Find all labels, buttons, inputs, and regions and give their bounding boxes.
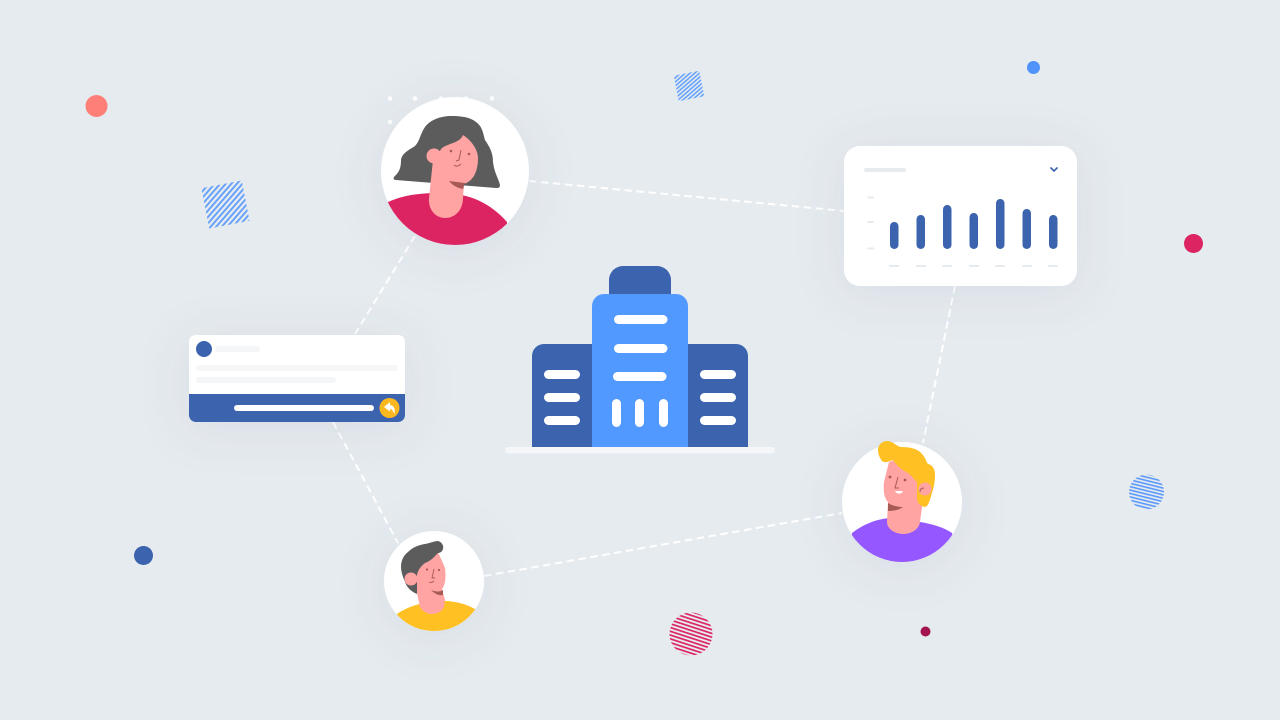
hatched circle crimson bbox=[670, 612, 712, 656]
hatched square small bbox=[674, 71, 704, 101]
building right wing bbox=[680, 344, 748, 447]
hatched circle blue bbox=[1129, 474, 1164, 510]
card footer bar bbox=[189, 394, 405, 422]
avatar: man bbox=[842, 441, 962, 570]
white dot grid near woman bbox=[388, 96, 494, 124]
boy ear bbox=[404, 572, 418, 586]
card avatar dot bbox=[196, 341, 212, 357]
woman facial features bbox=[450, 150, 470, 166]
boy neck shadow bbox=[431, 590, 443, 595]
woman neck and face bbox=[429, 135, 478, 218]
man hair bbox=[878, 441, 935, 507]
icon: reply button bbox=[380, 398, 400, 418]
avatar: woman bbox=[381, 97, 529, 260]
woman shirt bbox=[388, 193, 507, 245]
woman neck shadow bbox=[449, 181, 465, 189]
message card bbox=[189, 335, 405, 422]
woman hair bbox=[394, 116, 500, 188]
right wing windows bbox=[700, 370, 736, 425]
boy facial features bbox=[426, 569, 440, 582]
hatched square large bbox=[201, 180, 250, 229]
decorative dots bbox=[86, 61, 1203, 636]
man smile bbox=[895, 491, 903, 494]
card placeholder lines bbox=[196, 346, 398, 383]
dashed connector lines bbox=[333, 181, 955, 576]
boy neck and face bbox=[417, 553, 446, 614]
building central tower bbox=[592, 294, 688, 447]
building bbox=[505, 266, 775, 454]
illustration: company network bbox=[86, 61, 1203, 656]
boy hair bbox=[401, 541, 443, 594]
building base bbox=[505, 447, 775, 454]
building left wing bbox=[532, 344, 600, 447]
man neck shadow bbox=[888, 503, 903, 511]
icon: dropdown chevron bbox=[1050, 168, 1058, 171]
chart title placeholder bbox=[864, 168, 906, 172]
chart x axis ticks bbox=[889, 265, 1058, 267]
man ear bbox=[918, 482, 932, 496]
boy shirt bbox=[396, 600, 475, 631]
avatar: boy bbox=[384, 531, 484, 640]
woman ear bbox=[426, 148, 442, 164]
man facial features bbox=[889, 476, 924, 492]
tower windows bbox=[612, 315, 668, 427]
building roof block bbox=[609, 266, 671, 300]
chart y axis ticks bbox=[868, 196, 874, 250]
bar chart bbox=[890, 199, 1058, 249]
left wing windows bbox=[544, 370, 580, 425]
man shirt bbox=[852, 518, 952, 562]
man neck and face bbox=[884, 458, 926, 534]
chart card bbox=[844, 146, 1077, 286]
card reply bar bbox=[234, 405, 374, 411]
